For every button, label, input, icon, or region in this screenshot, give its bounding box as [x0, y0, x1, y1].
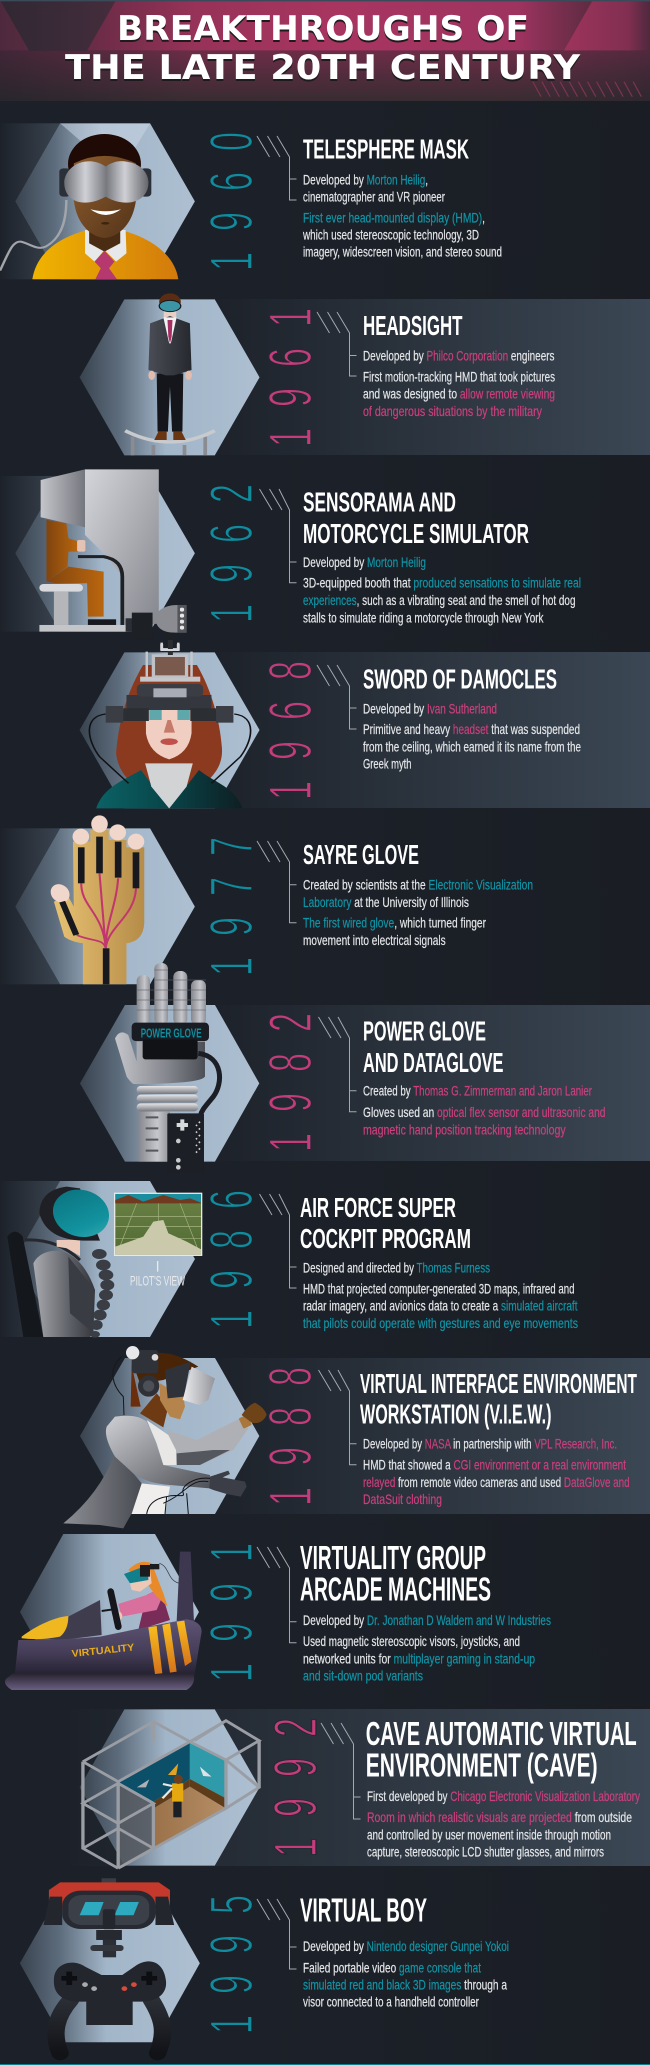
description: DataSuit clothing: [363, 1491, 442, 1507]
description: and sit-down pod variants: [303, 1667, 423, 1683]
main title: [65, 9, 580, 88]
description: First ever head-mounted display (HMD),: [303, 210, 485, 226]
description: Developed by Nintendo designer Gunpei Yokoi: [303, 1938, 509, 1954]
panel: 1977 Sayre Glove: [0, 815, 533, 984]
background band: [70, 1709, 650, 1866]
description: First motion-tracking HMD that took pictures: [363, 368, 555, 384]
panel: 1960 Telesphere Mask: [0, 111, 502, 279]
description: Greek myth: [363, 756, 412, 772]
illustration: woman under sword of damocles: [80, 640, 260, 808]
title: [366, 1715, 637, 1784]
year: 1960: [199, 111, 266, 271]
panel: 1991 Virtuality Group Arcade Machines: [5, 1522, 551, 1690]
bottom teal strip: [0, 2064, 650, 2065]
label: power glove: POWER GLOVE: [141, 1025, 202, 1040]
main title: THE LATE 20TH CENTURY: [65, 48, 580, 88]
description: radar imagery, and avionics data to create a simulated aircraft: [303, 1298, 578, 1314]
connector: [257, 841, 296, 923]
illustration: wired glove: [0, 815, 195, 984]
panel: 1982 Power Glove and DataGlove: [80, 963, 650, 1173]
illustration: virtuality pod: [5, 1534, 202, 1690]
panel: 1988 Virtual Interface Environment Workstation: [63, 1346, 650, 1528]
description: stalls to simulate riding a motorcycle through New York: [303, 609, 544, 625]
connector: [257, 1547, 296, 1643]
illustration: man with headsight on platform: [80, 293, 260, 455]
illustration: researcher in VR gear: [63, 1346, 267, 1528]
title: [360, 1368, 637, 1430]
illustration: virtual boy headset and controller: [20, 1878, 200, 2053]
year: 1988: [258, 1346, 325, 1506]
year: 1991: [199, 1522, 266, 1682]
description: imagery, widescreen vision, and stereo sound: [303, 244, 502, 260]
description: relayed from remote video cameras and used DataGlove and: [363, 1474, 630, 1490]
illustration: sensorama booth: [0, 469, 195, 649]
description: movement into electrical signals: [303, 932, 446, 948]
title: [300, 1192, 471, 1254]
description: [363, 1436, 630, 1507]
background band: [216, 299, 650, 455]
description: Used magnetic stereoscopic visors, joysticks, and: [303, 1633, 520, 1649]
title: AIR FORCE SUPER: [300, 1192, 456, 1223]
illustration: power glove: [80, 963, 259, 1173]
description: simulated red and black 3D images through a: [303, 1976, 507, 1992]
header banner: [0, 0, 650, 101]
description: [303, 1612, 551, 1683]
title: [303, 486, 529, 549]
year: 1982: [258, 992, 325, 1152]
description: visor connected to a handheld controller: [303, 1994, 479, 2010]
connector: [317, 312, 356, 376]
description: [303, 1259, 578, 1331]
background band: [216, 1358, 650, 1514]
title: COCKPIT PROGRAM: [300, 1223, 471, 1254]
description: [367, 1788, 640, 1860]
panel: 1968 Sword of Damocles: [80, 640, 650, 808]
main title: BREAKTHROUGHS OF: [117, 9, 529, 49]
connector: [321, 1723, 360, 1819]
description: Developed by Philco Corporation engineers: [363, 348, 554, 364]
connector: [260, 1194, 296, 1288]
title: VIRTUALITY GROUP: [300, 1539, 486, 1576]
background band: [216, 652, 650, 808]
description: Developed by Morton Heilig,: [303, 172, 428, 188]
background band: [216, 1005, 650, 1161]
year: 1962: [199, 463, 266, 623]
title: AND DATAGLOVE: [363, 1047, 504, 1078]
panel: 1986 Air Force Super Cockpit Program: [0, 1169, 578, 1338]
connector: [318, 1017, 356, 1112]
description: cinematographer and VR pioneer: [303, 188, 445, 204]
description: of dangerous situations by the military: [363, 403, 542, 419]
label: pilot's view: PILOT'S VIEW: [130, 1273, 185, 1289]
title: [363, 1016, 504, 1078]
description: magnetic hand position tracking technology: [363, 1121, 566, 1137]
description: [363, 348, 555, 419]
description: Developed by Morton Heilig: [303, 554, 426, 570]
description: [363, 700, 581, 772]
description: which used stereoscopic technology, 3D: [302, 226, 479, 242]
illustration: man in telesphere mask: [0, 123, 195, 279]
illustration: pilot and cockpit view: [0, 1181, 202, 1338]
title: SAYRE GLOVE: [303, 839, 419, 870]
year: 1961: [258, 287, 325, 447]
connector: [318, 1370, 356, 1465]
description: Failed portable video game console that: [303, 1959, 481, 1975]
description: [302, 172, 502, 260]
description: [303, 1938, 509, 2010]
year: 1977: [199, 816, 266, 976]
illustration: isometric cave room: [80, 1709, 260, 1868]
description: Developed by Ivan Sutherland: [363, 700, 497, 716]
connector: [260, 489, 296, 583]
description: networked units for multiplayer gaming in stand-up: [303, 1650, 535, 1666]
year: 1992: [263, 1697, 330, 1857]
label: virtuality: VIRTUALITY: [71, 1642, 135, 1660]
panel: 1995 Virtual Boy: [20, 1874, 509, 2053]
description: [303, 877, 533, 948]
description: [303, 554, 581, 625]
panel: 1961 Headsight: [80, 287, 650, 455]
title: [300, 1539, 491, 1608]
connector: [257, 1899, 296, 1969]
year: 1986: [199, 1169, 266, 1329]
connector: [317, 665, 356, 729]
description: Designed and directed by Thomas Furness: [303, 1259, 490, 1275]
description: [363, 1083, 606, 1137]
title: SENSORAMA AND: [303, 486, 456, 518]
title: POWER GLOVE: [363, 1016, 486, 1047]
title: VIRTUAL BOY: [300, 1892, 427, 1929]
description: and was designed to allow remote viewing: [363, 386, 555, 402]
panel: 1992 CAVE Automatic Virtual Environment: [70, 1697, 650, 1868]
description: Laboratory at the University of Illinois: [303, 894, 469, 910]
description: Room in which realistic visuals are projected from outside: [367, 1809, 632, 1825]
panel: 1962 Sensorama and Motorcycle Simulator: [0, 463, 581, 649]
description: Primitive and heavy headset that was suspended: [363, 721, 580, 737]
year: 1995: [199, 1874, 266, 2034]
description: Created by scientists at the Electronic Visualization: [303, 877, 533, 893]
description: The first wired glove, which turned finger: [303, 915, 486, 931]
description: Developed by NASA in partnership with VPL Research, Inc.: [363, 1436, 617, 1452]
connector: [257, 136, 296, 200]
year: 1968: [258, 640, 325, 800]
title: HEADSIGHT: [363, 310, 462, 341]
description: 3D-equipped booth that produced sensations to simulate real: [303, 575, 581, 591]
title: TELESPHERE MASK: [303, 134, 469, 164]
title: ARCADE MACHINES: [300, 1571, 491, 1608]
description: Developed by Dr. Jonathan D Waldern and W Industries: [303, 1612, 551, 1628]
